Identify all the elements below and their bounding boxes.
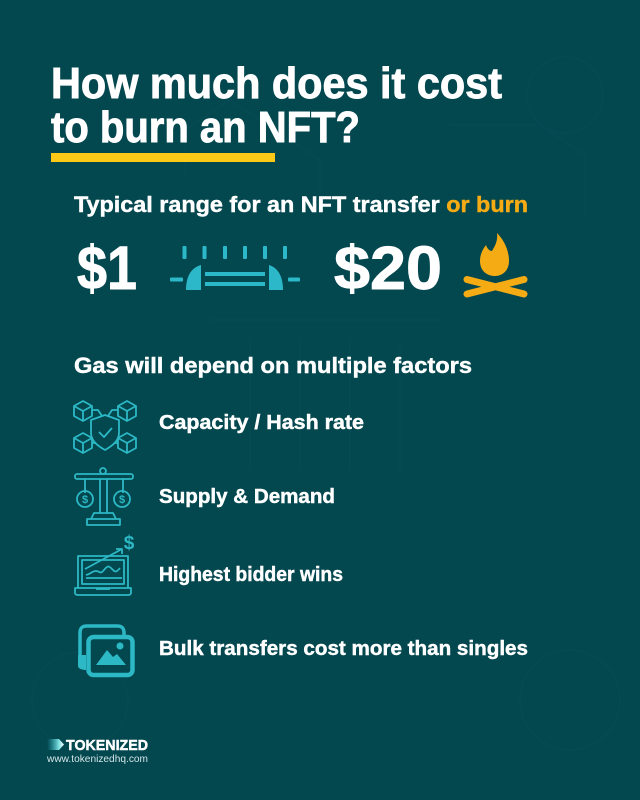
heading: typical range: Typical range for an NFT transfer or burn [74,192,528,217]
website: www.tokenizedhq.com [46,754,148,765]
title underline [51,153,275,162]
title: How much does it cost [51,59,502,108]
title [51,59,502,152]
factor: bulk transfers [78,626,528,675]
label: supply and demand: Supply & Demand [159,486,335,508]
label: bulk transfers: Bulk transfers cost more than singles [159,638,528,660]
icon: images [78,626,132,675]
price: low: $1 [77,234,137,302]
dollar signs [82,494,125,506]
factor: supply and demand [75,468,335,525]
price: high: $20 [334,234,442,302]
logo mark [47,739,64,750]
icon: laptop chart [75,549,131,595]
dollar signs: $ [119,494,125,506]
dollar sign: $ [124,533,135,554]
icon: scales [75,468,133,525]
factor: highest bidder [75,533,343,595]
label: capacity: Capacity / Hash rate [159,412,364,434]
logo wordmark: TOKENIZED [66,738,148,754]
brand logo [46,738,148,765]
title: to burn an NFT? [51,103,360,152]
icon: campfire [467,233,524,294]
heading: gas factors: Gas will depend on multiple factors [74,353,472,378]
factor: capacity [74,401,364,453]
dollar signs: $ [82,494,88,506]
label: highest bidder: Highest bidder wins [159,564,343,586]
icon: network shield [74,401,136,453]
icon: gas gauge [170,246,300,290]
